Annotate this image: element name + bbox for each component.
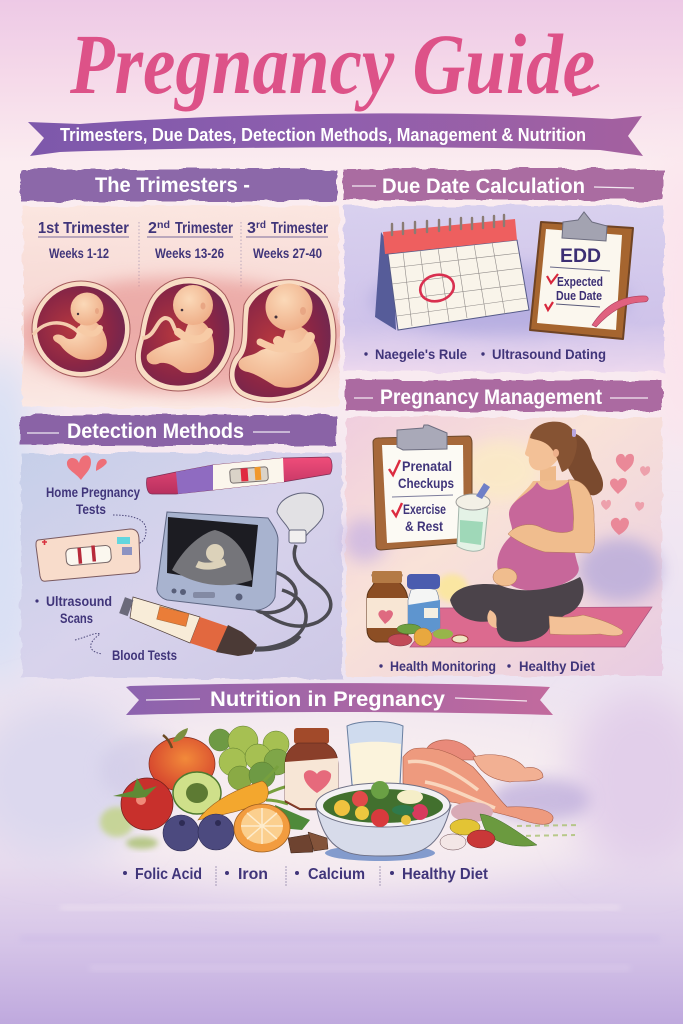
- icon: salad bowl: [316, 781, 451, 861]
- column: 2nd trimester heading: Weeks 13-26: [155, 245, 224, 261]
- icon: supplement bottle with heart: [285, 728, 338, 810]
- icon: blueberries: [163, 814, 234, 851]
- label: health monitoring: Health Monitoring: [390, 658, 496, 674]
- fetus: third trimester: [229, 280, 336, 402]
- icon: EDD clipboard: [530, 212, 648, 339]
- column: 3rd trimester heading: rd: [256, 220, 266, 231]
- column: 2nd trimester heading: [147, 220, 233, 261]
- column: 1st trimester heading: Weeks 1-12: [49, 245, 109, 261]
- icon: avocado: [173, 772, 221, 814]
- label: blood tests: [75, 633, 177, 663]
- label: home pregnancy tests: [46, 484, 140, 517]
- column: 3rd trimester heading: Weeks 27-40: [253, 245, 322, 261]
- label: ultrasound scans: [35, 593, 112, 626]
- subtitle ribbon: [28, 113, 643, 156]
- icon: blood test tube: [119, 597, 300, 656]
- label: iron: Iron: [238, 866, 268, 883]
- column: 2nd trimester heading: nd: [157, 220, 170, 231]
- label: ultrasound scans: Scans: [60, 610, 93, 626]
- icon: desk calendar: [375, 215, 529, 330]
- icon: EDD clipboard: Due Date: [556, 288, 602, 303]
- label: home pregnancy tests: Tests: [76, 501, 106, 517]
- fetus: first trimester: [32, 281, 130, 377]
- column: 1st trimester heading: 1st Trimester: [38, 220, 129, 237]
- icon: glass of milk: [347, 722, 403, 785]
- icon: tomato: [113, 778, 173, 830]
- icon: ultrasound machine: [157, 512, 331, 648]
- label: home pregnancy tests: Home Pregnancy: [46, 484, 140, 500]
- label: healthy diet: Healthy Diet: [402, 866, 489, 883]
- icon: chocolate pieces: [288, 832, 328, 853]
- label: calcium: Calcium: [308, 866, 365, 883]
- illustration: nutrition foods: [100, 722, 590, 861]
- icon: checklist clipboard: [373, 425, 472, 550]
- column: 2nd trimester heading: Trimester: [175, 220, 233, 237]
- icon: checklist clipboard: Checkups: [398, 475, 454, 491]
- header: the trimesters: The Trimesters -: [95, 174, 250, 197]
- header: detection methods: Detection Methods: [67, 420, 244, 443]
- column: 3rd trimester heading: [246, 220, 328, 261]
- icon: EDD clipboard: Expected: [557, 274, 603, 289]
- icon: carrot: [198, 766, 310, 830]
- icon: hearts: [67, 455, 107, 480]
- icon: pregnancy test stick: [147, 457, 332, 494]
- header: the trimesters: [20, 169, 336, 201]
- icon: chicken: [403, 740, 553, 824]
- illustration: pregnant woman: [450, 422, 623, 642]
- column: 1st trimester heading: [38, 220, 129, 261]
- panel: trimesters: [17, 169, 347, 407]
- title: Pregnancy Guide: [69, 16, 595, 112]
- icon: test cassette: [36, 529, 140, 581]
- label: folic acid: Folic Acid: [135, 866, 202, 883]
- header: pregnancy management: [346, 380, 662, 411]
- label: iron: [225, 866, 268, 883]
- header: due date calculation: Due Date Calculation: [382, 175, 585, 198]
- icon: orange slice: [234, 804, 290, 852]
- column: 3rd trimester heading: Trimester: [271, 220, 328, 237]
- icon: apple: [149, 728, 215, 791]
- icon: decorative hearts: [601, 454, 650, 535]
- icon: water cup: [456, 483, 490, 551]
- icon: egg, lemon, strawberry, leaves: [440, 802, 537, 850]
- fetus: second trimester: [135, 278, 234, 391]
- label: ultrasound scans: Ultrasound: [46, 593, 112, 609]
- column: 2nd trimester heading: 2: [148, 220, 157, 237]
- panel: detection methods: [20, 415, 342, 678]
- label: Naegele's Rule: Naegele's Rule: [375, 346, 467, 362]
- header ribbon: nutrition in pregnancy: Nutrition in Pregnancy: [210, 688, 445, 711]
- icon: EDD clipboard: EDD: [560, 246, 601, 267]
- icon: checklist clipboard: & Rest: [405, 518, 443, 534]
- label: Ultrasound Dating: Ultrasound Dating: [492, 346, 606, 362]
- label: healthy diet: Healthy Diet: [519, 658, 595, 674]
- panel: due date calculation: [343, 169, 664, 372]
- icon: ultrasound probe: [277, 493, 323, 543]
- panel: pregnancy management: [343, 380, 662, 676]
- label: blood tests: Blood Tests: [112, 647, 177, 663]
- header: pregnancy management: Pregnancy Management: [380, 386, 602, 409]
- header ribbon: nutrition in pregnancy: [126, 683, 553, 715]
- header: detection methods: [20, 415, 336, 445]
- icon: checklist clipboard: Exercise: [403, 501, 446, 517]
- header: due date calculation: [343, 169, 664, 200]
- icon: yoga mat: [410, 607, 652, 647]
- column: 3rd trimester heading: 3: [247, 220, 256, 237]
- icon: supplement bottles and pills: [367, 571, 468, 646]
- icon: broccoli and greens: [209, 726, 290, 790]
- subtitle text: Trimesters, Due Dates, Detection Methods, Management & Nutrition: [60, 125, 586, 145]
- icon: checklist clipboard: Prenatal: [402, 458, 452, 474]
